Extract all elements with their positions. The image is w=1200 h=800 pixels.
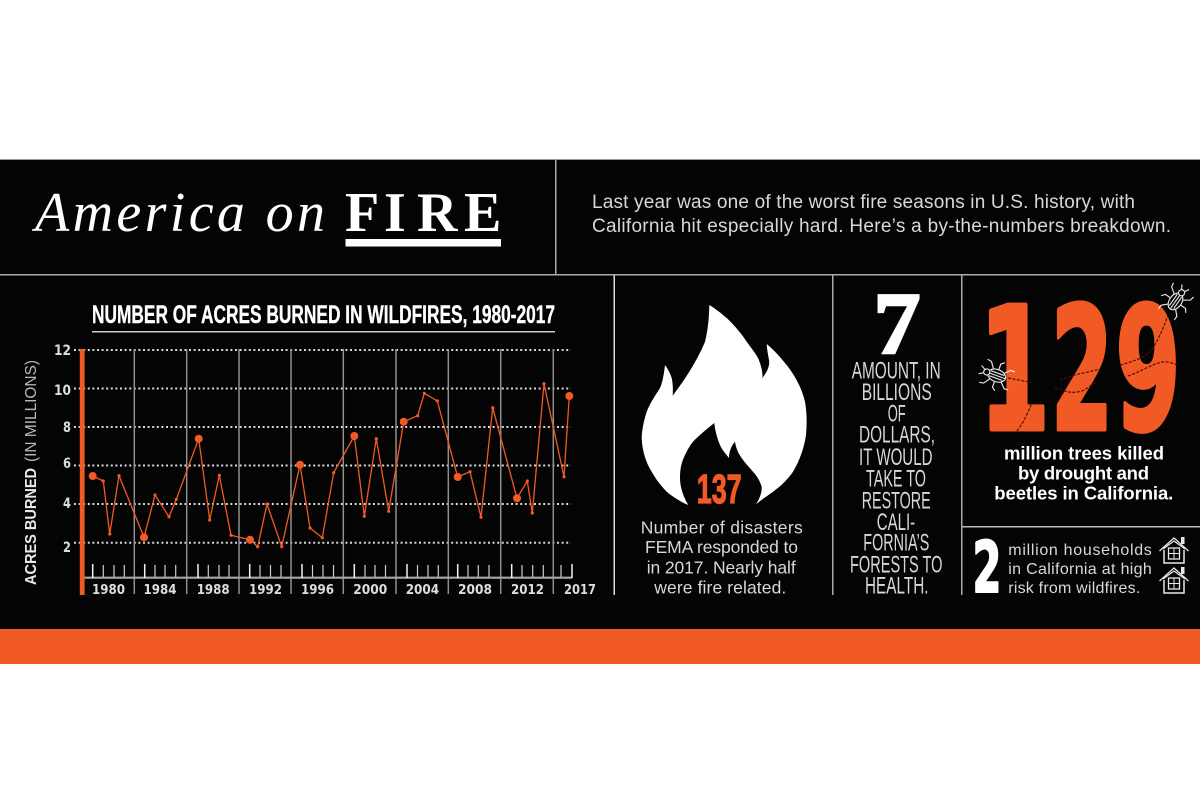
icon: flame (642, 305, 807, 505)
orange footer band (0, 629, 1200, 664)
y axis title: (IN MILLIONS) (23, 360, 40, 462)
stat: 137: 137 (697, 466, 742, 512)
panel: households at risk (972, 527, 1188, 609)
intro text: California hit especially hard. Here’s a by-the-numbers breakdown. (592, 216, 1171, 237)
y axis labels: 8 (63, 420, 71, 436)
y axis labels: 2 (63, 540, 71, 556)
x axis year labels: 2008 (458, 583, 492, 598)
x axis year labels: 2017 (564, 583, 596, 598)
chart heading: NUMBER OF ACRES BURNED IN WILDFIRES, 1980-2017 (92, 301, 555, 329)
panel: acres burned chart (23, 301, 596, 598)
panel: FEMA disasters (641, 305, 807, 597)
title (31, 182, 501, 246)
x axis year labels: 2012 (511, 583, 544, 598)
y axis labels: 6 (63, 456, 71, 472)
trees caption: beetles in California. (994, 482, 1173, 503)
cost text: TAKE TO (866, 466, 926, 493)
households text: million households (1008, 542, 1152, 559)
x axis year labels: 2004 (406, 583, 439, 598)
x axis year labels: 1996 (301, 583, 334, 598)
cost text: RESTORE (862, 487, 931, 514)
x axis year labels: 1992 (249, 583, 282, 598)
intro text (592, 192, 1171, 237)
cost text: FORNIA’S (863, 530, 929, 557)
stat: 129: 1 (979, 272, 1050, 470)
cost text: HEALTH. (865, 572, 928, 599)
title: America on (31, 182, 325, 244)
x axis year labels: 1984 (144, 583, 176, 598)
stat: 7: 7 (874, 276, 920, 373)
panel: restoration cost (850, 276, 942, 599)
intro text: Last year was one of the worst fire seasons in U.S. history, with (592, 192, 1135, 213)
caption: in 2017. Nearly half (647, 557, 796, 577)
orange y axis bar (80, 349, 85, 595)
icon: house lower (1160, 567, 1188, 593)
households text: in California at high (1008, 561, 1152, 578)
x axis with ticks (84, 564, 572, 578)
trees caption: million trees killed (1004, 442, 1164, 463)
icon: house upper (1160, 537, 1188, 563)
trees caption (994, 442, 1173, 503)
cost text: OF (888, 400, 906, 427)
y axis labels (54, 343, 71, 556)
cost text: FORESTS TO (850, 552, 942, 579)
stat: 2: 2 (972, 527, 1002, 609)
title: FIRE (345, 182, 501, 244)
x axis year labels: 1980 (92, 583, 125, 598)
y axis labels: 12 (54, 343, 71, 359)
icon: beetle lower (975, 356, 1017, 395)
cost text: IT WOULD (859, 444, 932, 471)
trees caption: by drought and (1018, 462, 1149, 483)
x axis year labels: 2000 (353, 583, 387, 598)
y axis title (23, 360, 40, 585)
households text (1008, 542, 1152, 597)
x axis year labels: 1988 (197, 583, 230, 598)
y axis labels: 4 (63, 496, 71, 512)
line series (89, 382, 573, 548)
stat: 129: 2 (1051, 272, 1113, 470)
caption: were fire related. (653, 577, 786, 597)
households text: risk from wildfires. (1008, 580, 1140, 597)
caption: Number of disasters (641, 517, 803, 537)
cost text: AMOUNT, IN (852, 357, 941, 384)
cost text (850, 357, 942, 599)
caption: FEMA responded to (645, 537, 798, 557)
caption (641, 517, 803, 597)
y axis title: ACRES BURNED (23, 468, 40, 585)
cost text: DOLLARS, (859, 422, 935, 449)
stat: 129 (979, 272, 1180, 470)
y axis labels: 10 (54, 383, 71, 399)
cost text: CALI- (877, 509, 915, 536)
panel: trees killed (975, 272, 1198, 503)
cost text: BILLIONS (862, 379, 932, 406)
icon: beetle upper (1154, 278, 1198, 323)
x axis year labels (92, 583, 596, 598)
